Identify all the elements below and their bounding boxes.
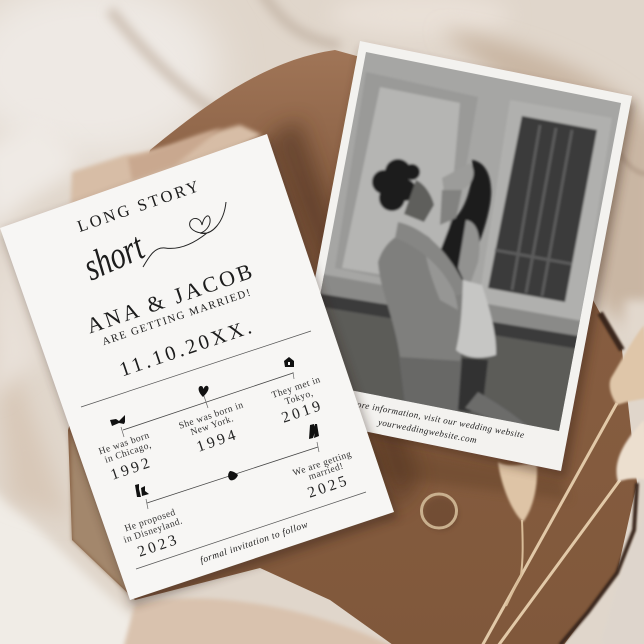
panel: timeline card: [0, 134, 394, 600]
event: 2023: in Disneyland.: [123, 516, 184, 546]
icon: bride and groom: [309, 424, 319, 439]
icon: bow tie: [110, 415, 125, 426]
pampas plume: lower: [616, 420, 644, 482]
wedding ring: [422, 494, 459, 531]
woman's legs: [458, 358, 488, 412]
are getting married: ARE GETTING MARRIED!: [101, 286, 253, 348]
icon: heart on line: [228, 471, 238, 480]
woman's hair: [436, 160, 491, 285]
website text: For more information, visit our wedding website: [331, 394, 525, 440]
timeline row one: [98, 357, 326, 484]
woman's face: [442, 163, 474, 192]
icon: proposal couple: [135, 484, 149, 497]
photo and card cast shadows on wood: [268, 120, 570, 510]
heart flourish: [143, 202, 226, 267]
window frame: [478, 100, 612, 325]
curb: [320, 274, 580, 336]
photo card shadow: [344, 45, 639, 480]
timeline row two: [123, 424, 353, 561]
event: 1992: in Chicago,: [104, 441, 153, 466]
event: 1994: 1994: [194, 426, 241, 456]
woman's shoulder: [458, 220, 480, 290]
icon: house: [284, 357, 294, 367]
panel: photo card: [289, 40, 632, 471]
names: ANA & JACOB: [83, 257, 258, 338]
man's hair: [372, 159, 420, 211]
heading: short script: short: [77, 224, 151, 289]
left card shadow: [3, 140, 398, 606]
event: 2019: 2019: [279, 397, 326, 427]
pampas plume: upper: [610, 325, 644, 405]
woman's dress: [456, 280, 496, 358]
event: 2019: They met in: [271, 375, 322, 401]
event: 1992: He was born: [98, 431, 151, 457]
event: 1994: She was born in: [178, 401, 245, 432]
man's face: [404, 180, 434, 222]
pampas plume: small: [498, 462, 537, 522]
man's shirt: [378, 232, 467, 362]
event: 1992: [98, 431, 155, 484]
event: 2025: married!: [308, 462, 345, 483]
event: 2025: [292, 450, 353, 502]
photo of couple: [320, 52, 621, 431]
wall panel: [335, 72, 478, 290]
event: 2023: 2023: [135, 531, 182, 561]
woman's arm: [394, 222, 463, 286]
website text: [358, 403, 524, 443]
woman's neck: [440, 190, 462, 225]
heading: long story: LONG STORY: [75, 176, 204, 236]
footer note: formal invitation to follow: [199, 519, 310, 566]
event: 2019: Tokyo,: [284, 389, 315, 408]
dried pampas stems: [482, 403, 620, 644]
date: 11.10.20XX.: [117, 315, 257, 381]
event: 2025: We are getting: [292, 450, 353, 479]
cobble ground: [326, 308, 574, 431]
website text: yourweddingwebsite.com: [376, 417, 478, 445]
event: 1992: 1992: [108, 454, 155, 484]
event: 2023: [123, 508, 184, 561]
event: 2025: 2025: [305, 472, 352, 502]
man's shorts: [399, 357, 461, 412]
icon: heart: [199, 386, 209, 397]
event: 2019: [271, 375, 326, 427]
event: 1994: [178, 401, 245, 456]
event: 2023: He proposed: [124, 508, 177, 534]
dark iron window: [488, 116, 597, 302]
event: 1994: New York.: [189, 414, 235, 438]
peach ribbon: [69, 123, 262, 204]
